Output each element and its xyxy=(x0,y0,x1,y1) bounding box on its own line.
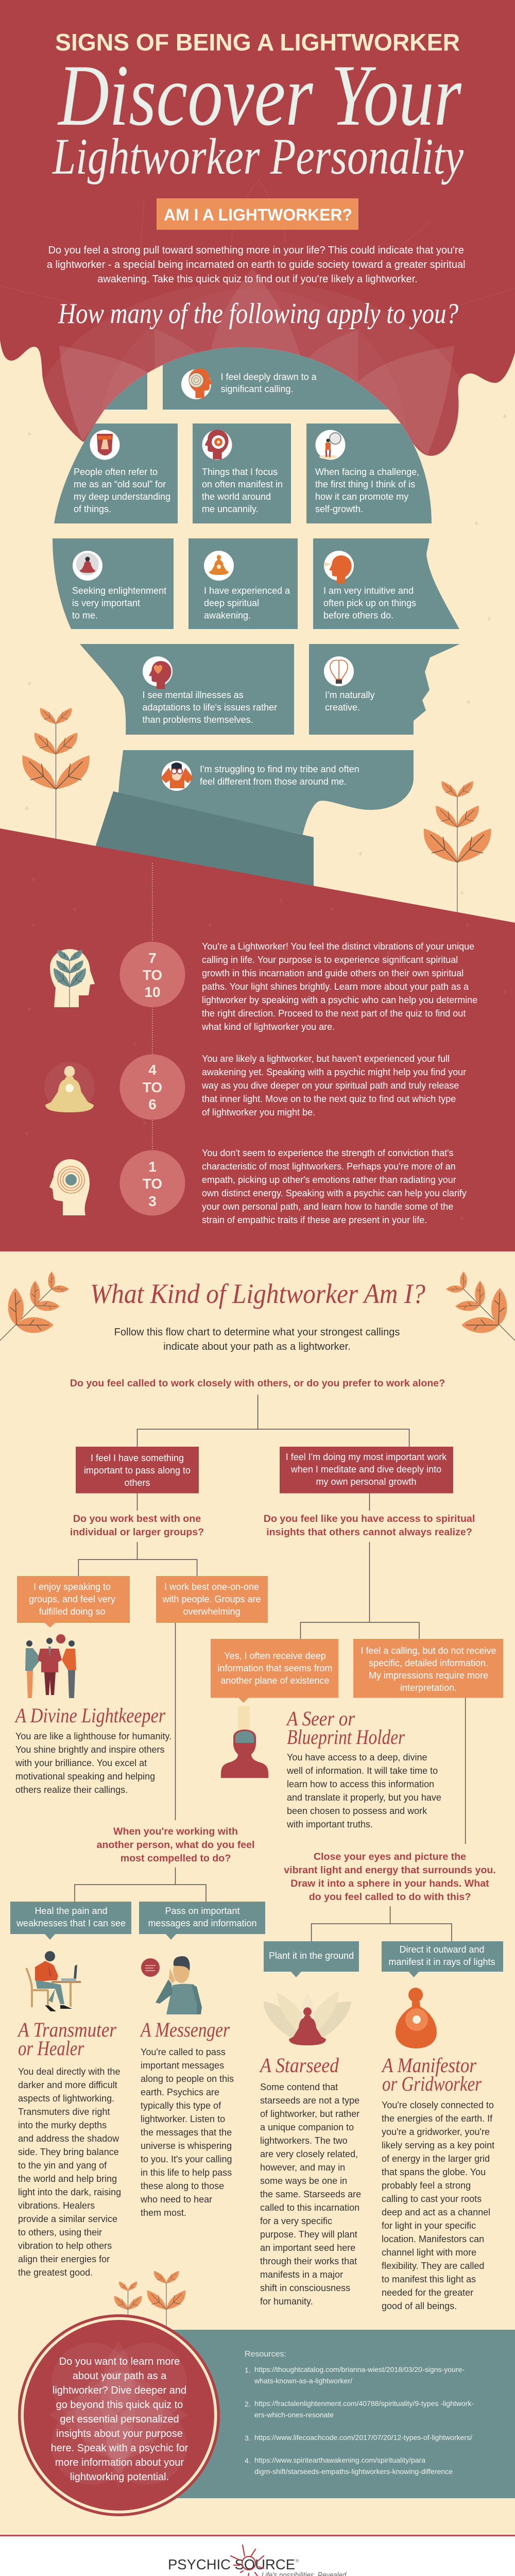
text: messenger: lightworker. Listen to xyxy=(141,2114,225,2124)
text: starseed: the same. Starseeds are xyxy=(260,2189,361,2199)
item: spiritual awakening: awakening. xyxy=(204,610,251,620)
plant: large above circle xyxy=(147,2271,185,2332)
score: 7 to 10 xyxy=(119,942,185,1007)
box: yes insights: another plane of existence xyxy=(220,1675,330,1686)
text: messenger: them most. xyxy=(141,2208,186,2218)
text: manifestor: the energies of the earth. If xyxy=(382,2113,493,2124)
text: divine lightkeeper: You shine brightly and inspire others xyxy=(15,1744,165,1755)
score: 4 to 6: 4 xyxy=(148,1062,157,1078)
text: transmuter: the greatest good. xyxy=(18,2267,93,2278)
panel: call to action circle: get essential personalized xyxy=(60,2414,179,2425)
question 4: Close your eyes and picture the xyxy=(314,1851,466,1862)
question 4: do you feel called to do with this? xyxy=(309,1891,471,1903)
text: messenger: who need to hear xyxy=(140,2194,212,2205)
text: starseed: an important seed here xyxy=(260,2243,355,2253)
question 4: vibrant light and energy that surrounds you. xyxy=(284,1865,496,1876)
text: starseed: for humanity. xyxy=(260,2296,313,2307)
heading: messenger: A Messenger xyxy=(139,2018,230,2041)
text: starseed: lightworkers. The two xyxy=(260,2136,348,2146)
text: starseed: manifests in a major xyxy=(260,2269,343,2280)
question 3: another person, what do you feel xyxy=(96,1839,255,1851)
text: transmuter: Transmuters dive right xyxy=(18,2107,110,2117)
icon: seer head xyxy=(221,1706,268,1778)
score text 1 to 3: your own personal path, and learn how to handle some of the xyxy=(202,1201,453,1212)
flow connector: 3 xyxy=(75,1867,206,1902)
score text 7 to 10: calling in life. Your purpose is to experience significant spiritual xyxy=(202,955,458,965)
box: feel a calling: specific, detailed information. xyxy=(369,1658,488,1668)
flow connector: 4 xyxy=(312,1906,452,1941)
text: starseed: Some contend that xyxy=(260,2082,338,2092)
box: pass on xyxy=(139,1902,265,1940)
item: creative: creative. xyxy=(325,702,360,713)
item: spiritual awakening xyxy=(204,551,290,620)
score: 7 to 10: TO xyxy=(143,967,162,983)
text: manifestor: good of all beings. xyxy=(382,2301,457,2311)
heading: divine lightkeeper: A Divine Lightkeeper xyxy=(14,1704,165,1727)
text: messenger: You're called to pass xyxy=(141,2047,226,2057)
icon: sprig right xyxy=(446,1272,515,1341)
item: enlightenment: to me. xyxy=(72,610,98,620)
box: pass along: I feel I have something xyxy=(91,1453,184,1463)
resource 2: https://fractalenlightenment.com/40788/spirituality/9-types -lightwork- xyxy=(254,2399,474,2408)
button: am I a lightworker xyxy=(157,198,358,230)
score text 4 to 6: of lightworker you might be. xyxy=(202,1107,315,1117)
item: mental illnesses: than problems themselves. xyxy=(142,715,253,725)
box: feel a calling: interpretation. xyxy=(400,1683,457,1693)
item: enlightenment: is very important xyxy=(72,598,140,608)
text: transmuter: aspects of lightworking. xyxy=(18,2093,114,2104)
heading: transmuter: or Healer xyxy=(18,2037,84,2060)
plant: left xyxy=(22,708,90,839)
text: transmuter: and address the shadow xyxy=(18,2133,119,2144)
text: messenger: important messages xyxy=(141,2060,224,2071)
resource 1: https://thoughtcatalog.com/brianna-wiest/2018/03/20-signs-youre- xyxy=(254,2365,465,2374)
score: 1 to 3: TO xyxy=(143,1176,162,1192)
text: starseed: called to this incarnation xyxy=(260,2202,359,2213)
box: direct xyxy=(382,1941,503,1977)
text: transmuter: the world and help bring xyxy=(18,2174,117,2184)
item: creative: I'm naturally xyxy=(325,690,374,700)
item: creative xyxy=(324,656,374,713)
text: manifestor: probably feel a strong xyxy=(382,2180,471,2191)
text: seer: You have access to a deep, divine xyxy=(287,1752,427,1762)
box: plant: Plant it in the ground xyxy=(269,1951,354,1961)
dotted timeline xyxy=(152,863,153,1150)
text: manifestor: deep and act as a channel xyxy=(382,2207,490,2217)
box: meditate xyxy=(280,1447,453,1493)
item: self-growth: how it can promote my xyxy=(315,492,408,502)
box: meditate: my own personal growth xyxy=(316,1477,417,1487)
question 2a: individual or larger groups? xyxy=(70,1527,204,1538)
box: direct: manifest it in rays of lights xyxy=(388,1957,495,1967)
box: groups xyxy=(17,1576,130,1628)
item: things manifest: on often manifest in xyxy=(202,479,283,489)
text: starseed: some ways be one in xyxy=(260,2176,347,2186)
item: intuitive xyxy=(323,551,416,620)
question 1: Do you feel called to work closely with others, or do you prefer to work alone? xyxy=(70,1378,445,1389)
panel: call to action circle: here. Speak with a psychic for xyxy=(51,2443,188,2454)
score text 7 to 10: lightworker by speaking with a psychic who can help you determine xyxy=(202,995,477,1005)
text: messenger: these along to those xyxy=(141,2181,224,2191)
text: starseed: however, and may in xyxy=(260,2162,345,2173)
text: manifestor: to manifest this light as xyxy=(382,2274,476,2284)
resource 3: https://www.lifecoachcode.com/2017/07/20/12-types-of-lightworkers/ xyxy=(254,2433,472,2442)
text: manifestor: for light in your specific xyxy=(382,2221,476,2231)
box: heal: weaknesses that I can see xyxy=(16,1918,126,1928)
item: mental illnesses xyxy=(142,656,277,725)
panel: red score section xyxy=(0,828,515,1251)
score text 7 to 10: growth in this incarnation and guide others on their own spiritual xyxy=(202,968,464,978)
item: enlightenment: Seeking enlightenment xyxy=(72,585,166,596)
icon: transmuter at laptop xyxy=(26,1951,81,2011)
panel: head silhouette quiz grid xyxy=(52,345,464,889)
score: 4 to 6: TO xyxy=(143,1079,162,1095)
box: one on one: with people. Groups are xyxy=(162,1594,261,1604)
box: yes insights: Yes, I often receive deep xyxy=(224,1651,326,1661)
box: yes insights: information that seems from xyxy=(217,1663,333,1673)
score text 7 to 10: what kind of lightworker you are. xyxy=(201,1022,335,1032)
text: divine lightkeeper: with your brilliance. You excel at xyxy=(15,1758,147,1768)
panel: resources band xyxy=(154,2330,515,2498)
score text 7 to 10: You're a Lightworker! You feel the distinct vibrations of your unique xyxy=(202,941,474,952)
item: drawn to a calling xyxy=(181,368,317,399)
question 2b: insights that others cannot always realize? xyxy=(266,1527,472,1538)
resource 4: https://www.spiritearthawakening.com/spirituality/para xyxy=(254,2456,425,2464)
text: transmuter: vibrations. Healers xyxy=(18,2200,95,2211)
text: starseed: starseeds are not a type xyxy=(260,2095,359,2106)
flow chart intro: Follow this flow chart to determine what your strongest callings xyxy=(114,1327,400,1338)
text: starseed: are very closely related, xyxy=(260,2149,358,2159)
item: mental illnesses: adaptations to life's issues rather xyxy=(142,702,277,713)
footer xyxy=(0,2535,515,2576)
heading: transmuter: A Transmuter xyxy=(16,2018,116,2041)
score text 1 to 3: strain of empathic traits if these are present in your life. xyxy=(202,1215,427,1225)
score text 7 to 10: the right direction. Proceed to the next part of the quiz to find out xyxy=(202,1008,466,1019)
panel: call to action circle: about your path as a xyxy=(73,2370,167,2382)
text: seer: been chosen to possess and work xyxy=(287,1806,427,1816)
box: direct: Direct it outward and xyxy=(399,1944,485,1955)
plant: right xyxy=(424,781,491,912)
item: drawn to a calling: I feel deeply drawn to a xyxy=(220,372,317,382)
icon: three people talking xyxy=(25,1634,76,1698)
panel: call to action circle: more information about your xyxy=(55,2457,184,2468)
text: manifestor: calling to cast your roots xyxy=(382,2194,482,2204)
text: manifestor: flexibility. They are called xyxy=(382,2261,484,2271)
logo mark: ® xyxy=(296,2558,299,2563)
panel: call to action circle: lightworking potential. xyxy=(70,2471,169,2483)
item: self-growth xyxy=(315,430,419,514)
flow chart intro: indicate about your path as a lightworker. xyxy=(163,1341,351,1352)
item: enlightenment xyxy=(72,551,166,620)
icon: starseed lotus xyxy=(264,1991,351,2045)
resource 2: ers-which-ones-resonate xyxy=(254,2411,334,2419)
item: spiritual awakening: deep spiritual xyxy=(204,598,259,608)
box: pass along: others xyxy=(124,1478,150,1488)
item: struggling tribe: feel different from those around me. xyxy=(200,776,347,787)
item: spiritual awakening: I have experienced a xyxy=(204,585,290,596)
text: transmuter: vibration to help others xyxy=(18,2241,112,2251)
heading: seer: A Seer or xyxy=(285,1707,355,1730)
item: things manifest: the world around xyxy=(202,492,271,502)
text: messenger: along to people on this xyxy=(141,2074,234,2084)
logo sun xyxy=(231,2545,264,2576)
resource 4: 4. xyxy=(245,2456,251,2465)
logo text: PSYCHIC SOURCE xyxy=(168,2556,295,2572)
item: old soul: my deep understanding xyxy=(74,492,170,502)
score text 1 to 3: characteristic of most lightworkers. Perhaps you're more of an xyxy=(202,1161,456,1172)
flow connector: 2b xyxy=(301,1542,466,1844)
flow connector: top xyxy=(137,1395,409,1511)
panel: call to action circle: lightworker? Dive deeper and xyxy=(53,2385,186,2396)
box: groups: groups, and feel very xyxy=(29,1594,115,1604)
box: feel a calling: I feel a calling, but do not receive xyxy=(360,1646,496,1656)
text: transmuter: You deal directly with the xyxy=(18,2066,120,2077)
panel: call to action circle xyxy=(18,2314,220,2516)
question 2a: Do you work best with one xyxy=(73,1513,201,1524)
text: messenger: the messages that the xyxy=(141,2127,232,2138)
icon: sprig left xyxy=(0,1272,69,1341)
box: heal: Heal the pain and xyxy=(35,1906,108,1916)
text: transmuter: light into the dark, raising xyxy=(18,2187,121,2197)
text: manifestor: location. Manifestors can xyxy=(382,2234,484,2244)
item: mental illnesses: I see mental illnesses as xyxy=(142,690,244,700)
score: 1 to 3 xyxy=(119,1150,185,1216)
score text 1 to 3: own distinct energy. Speaking with a psychic can help you clarify xyxy=(202,1188,467,1198)
item: self-growth: the first thing I think of is xyxy=(315,479,415,489)
text: seer: learn how to access this information xyxy=(287,1779,434,1789)
text: transmuter: into the murky depths xyxy=(18,2120,107,2130)
score text 1 to 3: You don't seem to experience the strength of conviction that's xyxy=(202,1148,454,1158)
icon: messenger on phone xyxy=(141,1956,202,2014)
item: drawn to a calling: significant calling. xyxy=(220,384,294,394)
box: pass along: important to pass along to xyxy=(84,1465,191,1476)
panel: top red drip header xyxy=(0,0,515,456)
item: struggling tribe xyxy=(161,761,359,791)
text: divine lightkeeper: others realize their callings. xyxy=(15,1785,128,1795)
text: messenger: earth. Psychics are xyxy=(141,2087,219,2097)
text: seer: and translate it properly, but you have xyxy=(287,1792,441,1803)
text: divine lightkeeper: motivational speaking and helping xyxy=(15,1771,155,1782)
item: intuitive: often pick up on things xyxy=(323,598,416,608)
text: manifestor: You're closely connected to xyxy=(382,2100,494,2110)
text: messenger: to you. It's your calling xyxy=(141,2154,232,2164)
box: yes insights xyxy=(211,1639,338,1703)
panel: call to action circle: insights about your purpose xyxy=(56,2428,183,2439)
item: old soul: of things. xyxy=(74,504,111,514)
score: 4 to 6: 6 xyxy=(148,1096,157,1112)
heading: manifestor: or Gridworker xyxy=(382,2072,482,2095)
box: groups: fulfilled doing so xyxy=(39,1606,106,1617)
box: plant xyxy=(264,1941,359,1977)
item: things manifest: me uncannily. xyxy=(202,504,259,514)
item: old soul xyxy=(74,430,170,514)
text: transmuter: to others, using their xyxy=(18,2227,102,2238)
text: starseed: purpose. They will plant xyxy=(260,2229,357,2240)
box: meditate: when I meditate and dive deeply into xyxy=(290,1464,441,1475)
score: 4 to 6 xyxy=(119,1054,185,1120)
intro paragraph: awakening. Take this quick quiz to find out if you're likely a lightworker. xyxy=(97,274,418,285)
text: transmuter: align their energies for xyxy=(18,2254,110,2264)
text: messenger: in this life to help pass xyxy=(141,2167,232,2178)
item: intuitive: I am very intuitive and xyxy=(323,585,414,596)
intro paragraph: a lightworker - a special being incarnated on earth to guide society toward a greater spiritual xyxy=(47,259,466,270)
text: messenger: universe is whispering xyxy=(141,2141,232,2151)
heading: seer: Blueprint Holder xyxy=(287,1725,405,1749)
score text 4 to 6: that inner light. Move on to the next quiz to find out which type xyxy=(202,1094,456,1104)
box: heal xyxy=(10,1902,131,1940)
score: 1 to 3: 3 xyxy=(148,1193,157,1209)
item: self-growth: self-growth. xyxy=(315,504,363,514)
text: transmuter: darker and more difficult xyxy=(18,2080,117,2090)
score: 1 to 3: 1 xyxy=(148,1159,157,1175)
flow connector: 2a xyxy=(78,1542,197,1820)
box: one on one: overwhelming xyxy=(183,1606,241,1617)
question 2b: Do you feel like you have access to spiritual xyxy=(264,1513,475,1524)
text: starseed: for a very specific xyxy=(260,2216,332,2226)
question 4: Draw it into a sphere in your hands. What xyxy=(290,1878,489,1889)
resource 2: 2. xyxy=(245,2400,251,2408)
text: messenger: typically this type of xyxy=(141,2100,221,2111)
heading: starseed: A Starseed xyxy=(259,2054,339,2077)
question 3: most compelled to do? xyxy=(121,1853,231,1864)
text: seer: well of information. It will take time to xyxy=(286,1766,438,1776)
text: starseed: a unique companion to xyxy=(260,2122,354,2132)
score: 7 to 10: 10 xyxy=(144,984,161,1000)
box: pass along xyxy=(76,1447,199,1493)
panel: call to action circle: Do you want to learn more xyxy=(59,2356,180,2367)
box: meditate: I feel I'm doing my most important work xyxy=(286,1452,447,1462)
item: old soul: me as an “old soul” for xyxy=(74,479,166,489)
box: pass on: messages and information xyxy=(148,1918,257,1928)
text: manifestor: channel light with more xyxy=(382,2247,476,2258)
resource 1: whats-known-as-a-lightworker/ xyxy=(254,2377,352,2385)
box: groups: I enjoy speaking to xyxy=(33,1582,111,1592)
resource 1: 1. xyxy=(245,2366,251,2374)
box: feel a calling: My impressions require more xyxy=(369,1670,488,1681)
text: manifestor: that spans the globe. You xyxy=(382,2167,486,2177)
icon: meditator glow xyxy=(44,1062,95,1112)
icon: manifestor glow xyxy=(396,1986,437,2048)
score: 7 to 10: 7 xyxy=(148,950,157,966)
shoulders xyxy=(94,791,314,889)
item: old soul: People often refer to xyxy=(74,467,158,477)
text: manifestor: needed for the greater xyxy=(382,2287,473,2298)
score text 4 to 6: You are likely a lightworker, but haven't experienced your full xyxy=(202,1054,450,1064)
item: struggling tribe: I'm struggling to find my tribe and often xyxy=(200,764,359,774)
text: manifestor: likely serving as a key point xyxy=(382,2140,494,2150)
intro paragraph: Do you feel a strong pull toward something more in your life? This could indicate that you're xyxy=(48,245,464,256)
title: signs of being a lightworker: SIGNS OF BEING A LIGHTWORKER xyxy=(55,29,460,56)
box: pass on: Pass on important xyxy=(165,1906,240,1916)
text: starseed: through their works that xyxy=(260,2256,357,2266)
text: transmuter: side. They bring balance xyxy=(18,2147,119,2157)
text: divine lightkeeper: You are like a lighthouse for humanity. xyxy=(15,1731,171,1741)
item: things manifest: Things that I focus xyxy=(202,467,278,477)
item: intuitive: before others do. xyxy=(323,610,393,620)
resources heading: Resources: xyxy=(245,2350,286,2359)
text: transmuter: to the yin and yang of xyxy=(18,2160,107,2171)
text: starseed: shift in consciousness xyxy=(260,2283,350,2293)
question 3: When you're working with xyxy=(113,1826,238,1837)
icon: head with brain xyxy=(49,1159,90,1215)
plant: small above circle xyxy=(114,2281,142,2318)
score text 7 to 10: paths. Your light shines brightly. Learn more about your path as a xyxy=(202,981,469,992)
score text 1 to 3: empath, picking up other's emotions rather than radiating your xyxy=(202,1175,456,1185)
panel: call to action circle: go beyond this quick quiz to xyxy=(56,2399,183,2411)
heading: manifestor: A Manifestor xyxy=(381,2054,476,2077)
text: manifestor: you're a gridworker, you're xyxy=(382,2127,490,2137)
text: manifestor: of energy in the larger grid xyxy=(382,2154,490,2164)
item: self-growth: When facing a challenge, xyxy=(315,467,419,477)
icon: head with plant xyxy=(50,949,95,1007)
text: seer: with important truths. xyxy=(286,1819,373,1829)
box: feel a calling xyxy=(353,1639,503,1698)
score text 4 to 6: awakening yet. Speaking with a psychic might help you find your xyxy=(202,1067,466,1077)
score text 4 to 6: way as you dive deeper on your spiritual path and truly release xyxy=(201,1080,459,1091)
text: starseed: of lightworker, but rather xyxy=(260,2109,359,2119)
button: am I a lightworker: AM I A LIGHTWORKER? xyxy=(164,206,352,224)
resource 3: 3. xyxy=(245,2434,251,2442)
decorative stars on cream xyxy=(24,413,507,896)
resource 4: digm-shift/starseeds-empaths-lightworkers-knowing-difference xyxy=(254,2467,453,2476)
heading: what kind of lightworker: What Kind of Lightworker Am I? xyxy=(90,1278,425,1309)
box: one on one xyxy=(156,1576,268,1623)
item: things manifest xyxy=(202,430,283,514)
text: transmuter: provide a similar service xyxy=(18,2214,117,2224)
box: one on one: I work best one-on-one xyxy=(164,1582,259,1592)
